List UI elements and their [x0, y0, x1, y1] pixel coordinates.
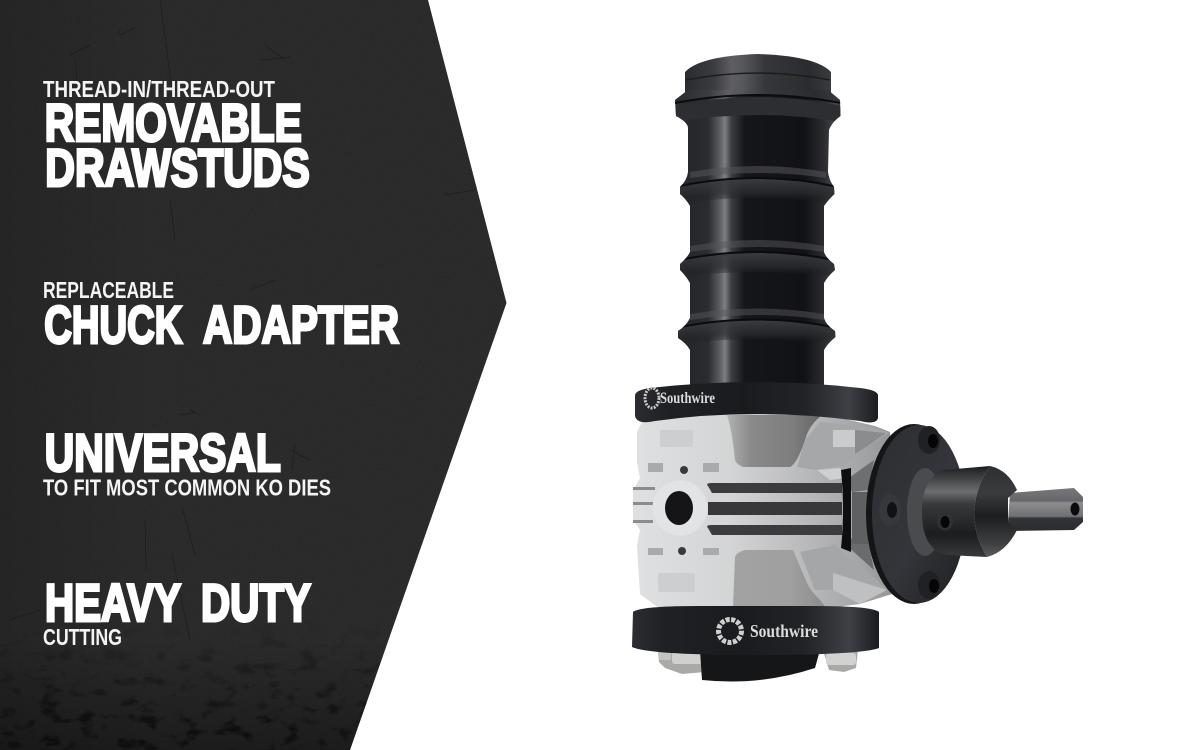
eye ring — [652, 480, 708, 536]
slot — [841, 468, 851, 552]
text block: heavy duty: HEAVY — [45, 574, 181, 633]
bottom flange ring with Southwire logo: Southwire — [750, 621, 818, 641]
right shoulder shading — [797, 422, 889, 470]
text block: heavy duty: CUTTING — [43, 624, 122, 650]
mounting plate with bolts — [866, 424, 966, 604]
text block: removable drawstuds: REMOVABLE — [45, 94, 302, 153]
top flange ring with Southwire logo — [635, 382, 878, 422]
text block: removable drawstuds — [43, 76, 310, 198]
cooling fins — [707, 483, 842, 493]
text block: removable drawstuds: THREAD-IN/THREAD-OUT — [43, 76, 276, 102]
hex shank — [1008, 488, 1083, 531]
panel: dark arrow-shaped text panel — [0, 0, 520, 750]
bearing recess — [907, 468, 943, 556]
silver gearbox body — [633, 412, 905, 609]
text block: chuck adapter: REPLACEABLE — [43, 277, 174, 303]
cone end — [974, 466, 1017, 557]
text block: chuck adapter — [43, 277, 399, 355]
bottom nuts and boss — [658, 650, 858, 682]
chuck collar with set screw — [922, 466, 1017, 557]
text block: chuck adapter: CHUCK — [44, 296, 182, 355]
text block: heavy duty — [43, 574, 311, 650]
lower neck — [733, 550, 827, 609]
bottom flange ring with Southwire logo — [632, 606, 879, 655]
text block: heavy duty: DUTY — [201, 574, 311, 633]
upper neck — [727, 415, 822, 467]
text block: removable drawstuds: DRAWSTUDS — [45, 139, 310, 198]
panel recess upper left — [660, 430, 693, 447]
bolts — [918, 426, 940, 454]
top flange ring with Southwire logo: Southwire — [660, 390, 715, 407]
text block: universal: TO FIT MOST COMMON KO DIES — [43, 474, 331, 500]
text block: universal: UNIVERSAL — [45, 424, 281, 483]
panel recess lower left — [658, 573, 695, 592]
text block: chuck adapter: ADAPTER — [203, 296, 399, 355]
product photo: chuck adapter illustration — [632, 54, 1083, 682]
shaft: ribbed black tube — [675, 54, 841, 390]
